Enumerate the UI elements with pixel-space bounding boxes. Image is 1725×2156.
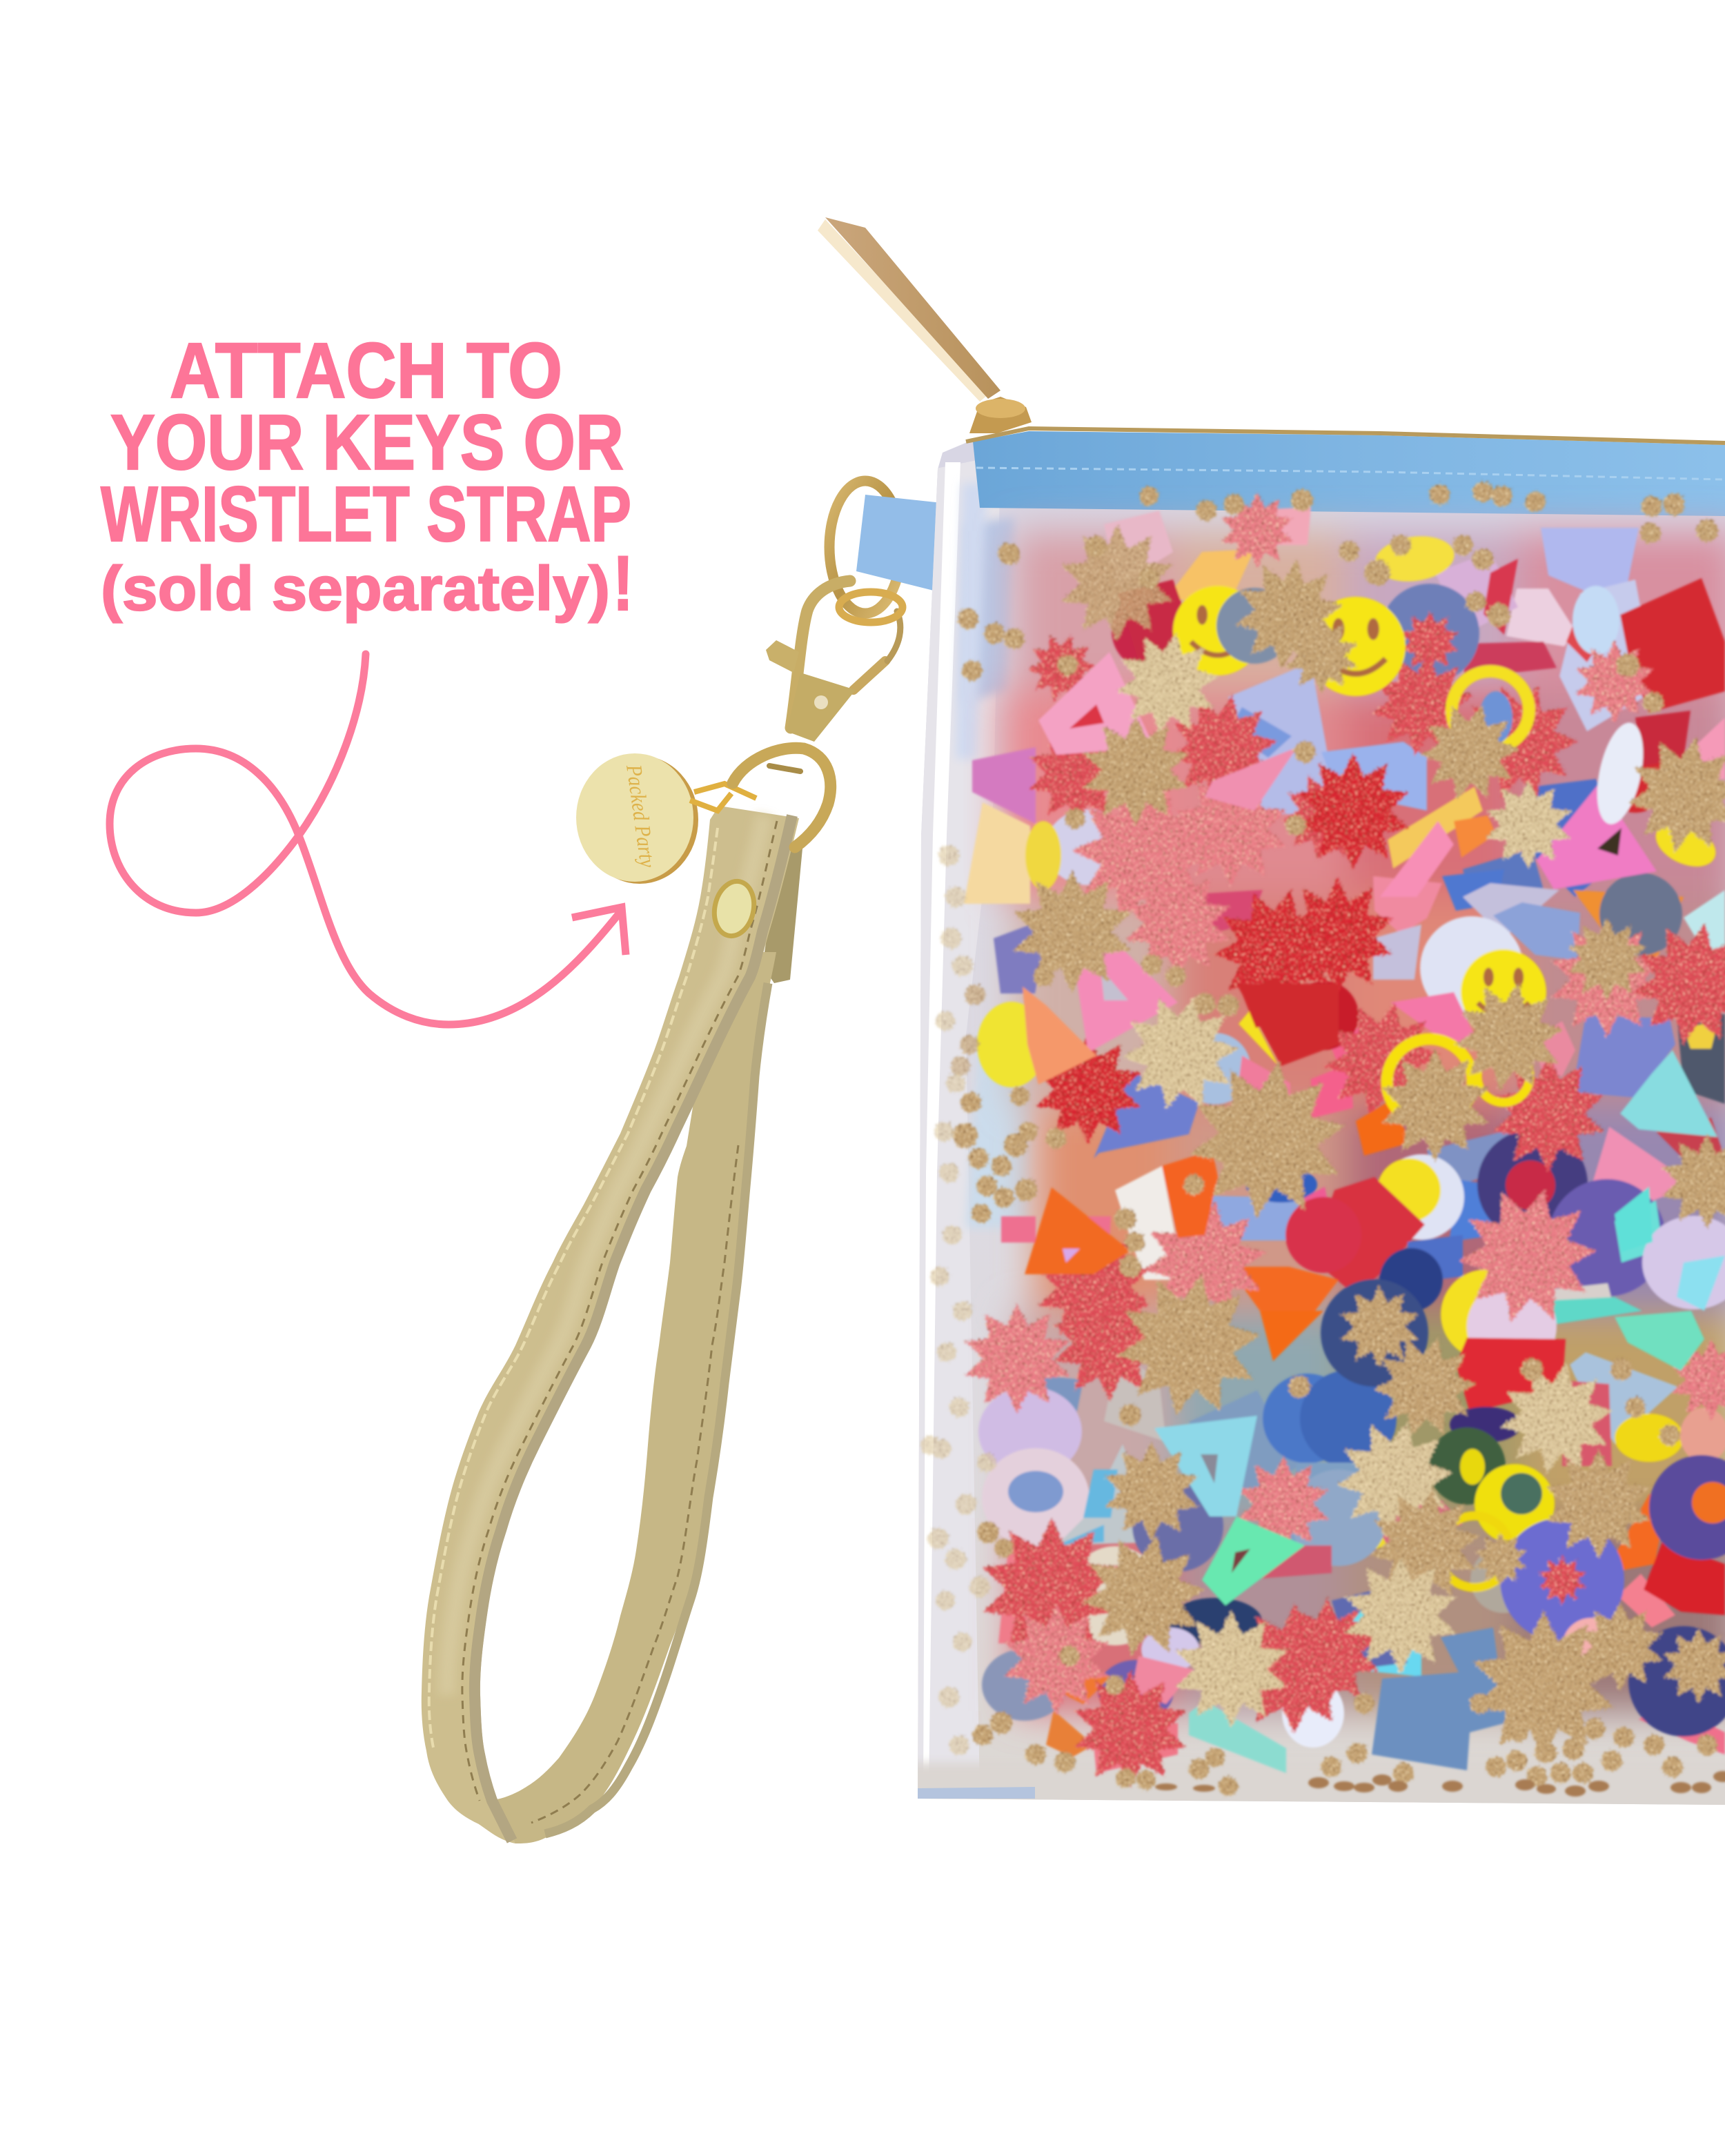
medallion charm: [576, 753, 698, 884]
title: [101, 327, 633, 626]
title: ATTACH TO: [170, 327, 562, 414]
lobster clasp: [733, 581, 903, 847]
zipper pull: [818, 217, 1032, 433]
arrow: [110, 654, 626, 1025]
front strap edge: [475, 815, 792, 1841]
back strap stitching: [531, 1145, 738, 1823]
glitter dots: [951, 482, 1718, 1796]
rivet: [709, 878, 759, 940]
pale dots on clear film: [920, 845, 996, 1755]
title: YOUR KEYS OR: [110, 399, 624, 486]
colour wash behind confetti: [1000, 531, 1725, 1711]
front strap sheen: [447, 815, 765, 1695]
letter and smiley sequins: [977, 531, 1723, 1773]
front strap: [422, 806, 799, 1843]
flattened copper dots: [1155, 1771, 1725, 1797]
clear pouch: [897, 428, 1725, 1818]
small connecting ring: [839, 592, 903, 622]
front strap inner stitching: [462, 821, 777, 1801]
blue fabric tab: [856, 495, 952, 591]
clasp body: [787, 673, 856, 742]
pouch body: [918, 439, 1725, 1805]
glitter stars: red and pink: [965, 492, 1725, 1788]
back strap: [479, 952, 776, 1843]
chain links: [690, 784, 756, 811]
wristlet strap: [422, 806, 802, 1843]
d-ring: [829, 481, 901, 613]
title: WRISTLET STRAP: [101, 471, 631, 557]
strap end tab: [762, 845, 802, 983]
sequin sheets and discs: [964, 507, 1725, 1773]
confetti: [920, 482, 1725, 1797]
medallion charm: Packed Party: [622, 762, 661, 869]
clear film highlights: [897, 455, 1725, 1818]
front strap outer stitching: [429, 828, 718, 1751]
glitter stars: gold: [1013, 524, 1725, 1759]
back strap edge: [545, 983, 768, 1834]
zipper tape: [973, 431, 1725, 516]
swivel hook: [733, 748, 831, 847]
title: (sold separately): [101, 555, 610, 624]
thumb lever: [766, 640, 799, 673]
title: !: [613, 540, 633, 626]
zipper teeth: [966, 428, 1725, 443]
